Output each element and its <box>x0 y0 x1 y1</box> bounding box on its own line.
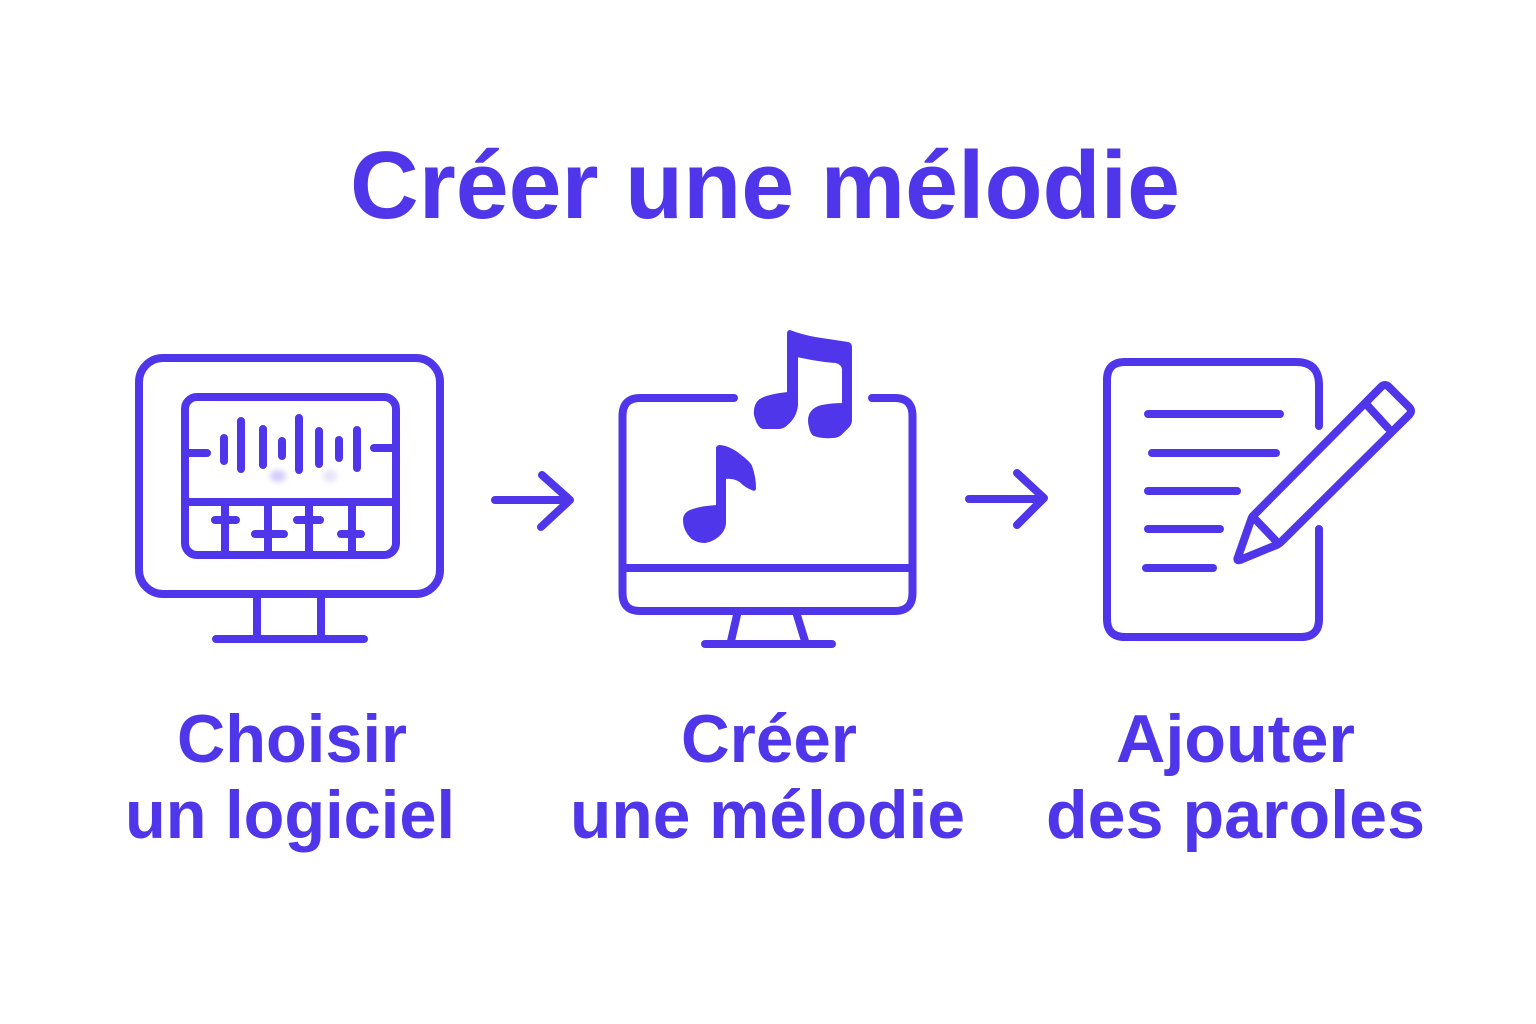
label: choisir un logiciel: Choisir <box>177 701 407 777</box>
label: choisir un logiciel <box>125 701 455 853</box>
single music note <box>684 446 755 542</box>
double music note <box>755 331 851 437</box>
text lines <box>1146 414 1280 568</box>
arrow 2 <box>969 473 1044 525</box>
label: créer une mélodie: Créer <box>681 701 857 777</box>
label: créer une mélodie: une mélodie <box>570 777 965 853</box>
mixer sliders <box>215 506 361 553</box>
title: Créer une mélodie <box>350 132 1180 239</box>
audio waveform <box>188 418 394 482</box>
icon: lyrics sheet with pencil <box>1107 362 1411 637</box>
pencil <box>1237 385 1411 560</box>
label: créer une mélodie <box>570 701 965 853</box>
label: ajouter des paroles: Ajouter <box>1116 701 1355 777</box>
label: ajouter des paroles: des paroles <box>1046 777 1425 853</box>
icon: monitor with audio software <box>139 358 440 639</box>
label: ajouter des paroles <box>1046 701 1425 853</box>
label: choisir un logiciel: un logiciel <box>125 777 455 853</box>
arrow 1 <box>495 475 570 527</box>
icon: monitor with music notes <box>622 331 912 644</box>
